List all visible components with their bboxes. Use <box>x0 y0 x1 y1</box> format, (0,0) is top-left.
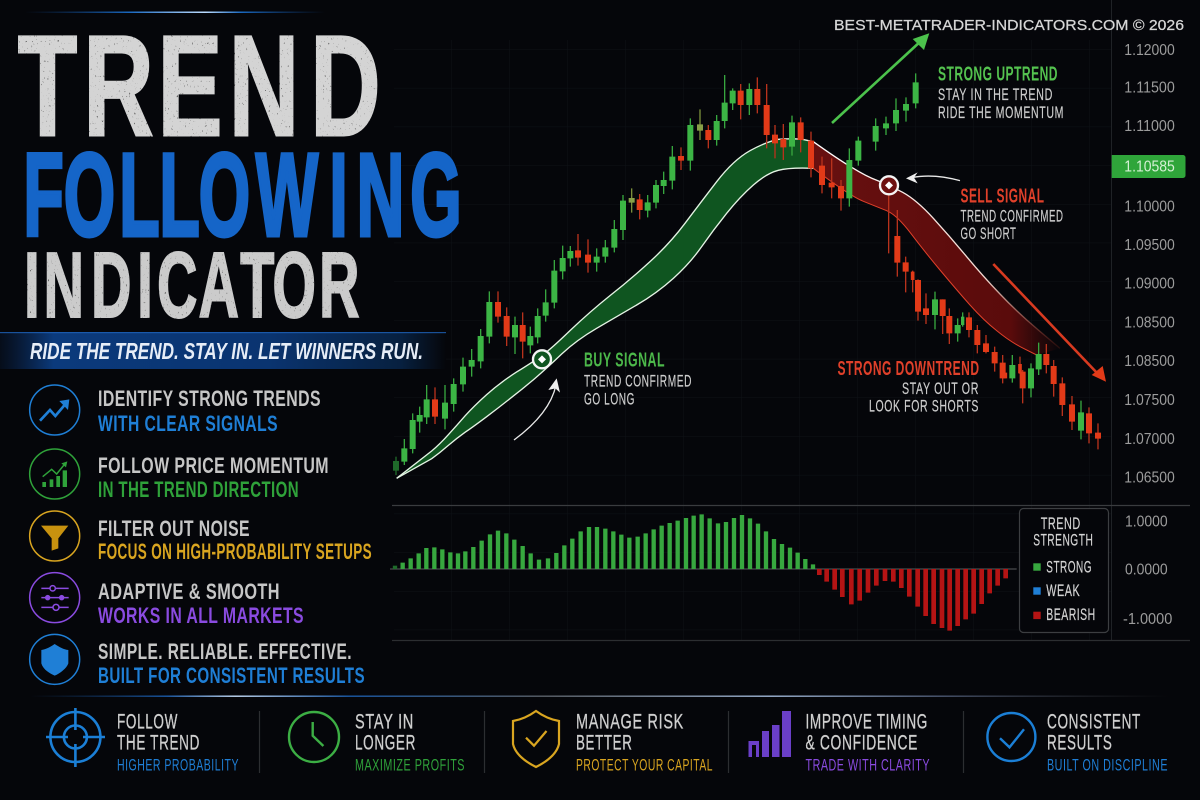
price axis: 1.11000 <box>1124 118 1175 135</box>
icon: clock <box>289 712 339 762</box>
legend item: bearish: BEARISH <box>1046 606 1096 624</box>
callout: strong downtrend: STAY OUT OR <box>902 379 979 398</box>
buy signal marker <box>533 350 551 368</box>
feature: follow price momentum <box>30 449 329 502</box>
benefit: manage risk better: PROTECT YOUR CAPITAL <box>576 756 713 774</box>
benefit: improve timing: & CONFIDENCE <box>806 731 918 754</box>
legend item: strong: STRONG <box>1046 558 1092 576</box>
feature list <box>30 385 372 688</box>
benefit: manage risk better: BETTER <box>576 731 632 754</box>
feature: follow price momentum: IN THE TREND DIRECTION <box>98 477 299 502</box>
icon: check circle <box>987 713 1035 761</box>
callout: buy signal: GO LONG <box>584 390 635 408</box>
icon: check shield <box>513 711 559 767</box>
benefit: follow the trend: HIGHER PROBABILITY <box>117 756 239 774</box>
trend strength histogram <box>390 514 1017 631</box>
callout: strong downtrend: LOOK FOR SHORTS <box>869 396 979 416</box>
arrow: sell signal pointer <box>906 172 960 183</box>
green candlesticks <box>396 73 1081 475</box>
callout: sell signal: TREND CONFIRMED <box>960 206 1064 226</box>
legend: trend strength: TREND <box>1041 515 1081 533</box>
red candlesticks <box>435 77 1098 449</box>
feature: identify strong trends: IDENTIFY STRONG TRENDS <box>98 386 321 411</box>
callout: sell signal: SELL SIGNAL <box>960 186 1044 208</box>
callout: sell signal: GO SHORT <box>960 224 1016 243</box>
feature: simple reliable effective: BUILT FOR CONSISTENT RESULTS <box>98 663 365 688</box>
legend item: weak: WEAK <box>1046 582 1080 600</box>
oscillator axis: -1.0000 <box>1123 611 1172 628</box>
feature: simple reliable effective <box>30 634 365 688</box>
feature: identify strong trends <box>30 385 321 436</box>
benefit: stay in longer <box>289 710 465 774</box>
price axis <box>1124 42 1175 487</box>
current price tag <box>1112 155 1186 178</box>
benefit: improve timing: IMPROVE TIMING <box>806 710 928 733</box>
tagline banner <box>0 332 446 369</box>
feature: filter out noise: FOCUS ON HIGH-PROBABILITY SETUPS <box>98 539 372 564</box>
benefit: improve timing: TRADE WITH CLARITY <box>806 756 930 774</box>
price axis: 1.11500 <box>1124 80 1175 97</box>
price axis: 1.09500 <box>1124 237 1175 254</box>
feature: identify strong trends: WITH CLEAR SIGNALS <box>98 411 278 436</box>
current price tag: 1.10585 <box>1124 159 1175 176</box>
trend ribbon: bullish <box>397 139 813 478</box>
callout: strong uptrend: RIDE THE MOMENTUM <box>938 103 1064 122</box>
price axis: 1.12000 <box>1124 42 1175 59</box>
benefit: improve timing <box>748 710 930 774</box>
legend: trend strength <box>1020 508 1108 632</box>
arrow: uptrend <box>832 33 929 123</box>
title line: TREND: TREND <box>18 7 381 167</box>
feature: simple reliable effective: SIMPLE. RELIABLE. EFFECTIVE. <box>98 639 352 664</box>
icon: shield <box>30 634 80 684</box>
trend ribbon: bearish <box>813 142 1060 355</box>
benefit: consistent results: CONSISTENT <box>1047 710 1141 733</box>
title line: INDICATOR: INDICATOR <box>24 235 359 338</box>
callout: sell signal <box>960 186 1064 243</box>
benefit: stay in longer: STAY IN <box>355 710 414 733</box>
benefit: manage risk better <box>513 710 713 774</box>
callout: buy signal: TREND CONFIRMED <box>584 372 692 390</box>
oscillator axis <box>1123 514 1172 628</box>
price axis: 1.06500 <box>1124 470 1175 487</box>
icon: funnel <box>30 511 80 561</box>
tagline banner: RIDE THE TREND. STAY IN. LET WINNERS RUN. <box>30 338 423 364</box>
icon: sliders <box>30 573 80 623</box>
oscillator axis: 0.0000 <box>1125 562 1168 579</box>
price axis: 1.07500 <box>1124 392 1175 409</box>
feature: adaptive and smooth <box>30 573 304 628</box>
feature: follow price momentum: FOLLOW PRICE MOMENTUM <box>98 453 329 478</box>
callout: strong uptrend <box>938 64 1064 122</box>
icon: momentum bars <box>30 449 80 499</box>
price chart <box>396 73 1098 478</box>
red bars <box>819 569 1006 631</box>
price axis: 1.07000 <box>1124 431 1175 448</box>
price axis: 1.08500 <box>1124 353 1175 370</box>
title line: FOLLOWING: FOLLOWING <box>23 129 462 261</box>
icon: rising bars <box>748 711 791 757</box>
callout: strong uptrend: STAY IN THE TREND <box>938 85 1053 104</box>
feature: adaptive and smooth: WORKS IN ALL MARKETS <box>98 603 304 628</box>
title <box>18 7 462 338</box>
feature: filter out noise <box>30 511 372 564</box>
feature: filter out noise: FILTER OUT NOISE <box>98 516 250 541</box>
callout: buy signal <box>584 350 692 408</box>
benefit: follow the trend: THE TREND <box>117 731 200 754</box>
price axis: 1.10000 <box>1124 199 1175 216</box>
feature: adaptive and smooth: ADAPTIVE & SMOOTH <box>98 579 280 604</box>
sell signal marker <box>880 176 898 194</box>
benefit: follow the trend: FOLLOW <box>117 710 178 733</box>
green bars <box>395 514 813 569</box>
benefit: follow the trend <box>46 708 239 774</box>
top accent line <box>25 12 325 13</box>
callout: strong uptrend: STRONG UPTREND <box>938 64 1058 86</box>
arrow: buy signal pointer <box>514 378 560 440</box>
icon: rising arrow <box>30 385 80 435</box>
icon: target <box>46 708 105 767</box>
price axis: 1.09000 <box>1124 276 1175 293</box>
callout: strong downtrend: STRONG DOWNTREND <box>838 358 980 380</box>
callout: strong downtrend <box>838 358 980 416</box>
bottom benefits strip <box>30 696 1170 774</box>
oscillator axis: 1.0000 <box>1125 514 1168 531</box>
benefit: consistent results: RESULTS <box>1047 731 1112 754</box>
benefit: stay in longer: MAXIMIZE PROFITS <box>355 756 465 774</box>
benefit: stay in longer: LONGER <box>355 731 416 754</box>
price axis: 1.08500 <box>1124 314 1175 331</box>
legend: trend strength: STRENGTH <box>1033 532 1093 550</box>
site credit: BEST-METATRADER-INDICATORS.COM © 2026 <box>834 18 1184 34</box>
arrow: downtrend <box>993 264 1106 382</box>
benefit: manage risk better: MANAGE RISK <box>576 710 684 733</box>
callout: buy signal: BUY SIGNAL <box>584 350 665 372</box>
benefit: consistent results <box>987 710 1168 774</box>
